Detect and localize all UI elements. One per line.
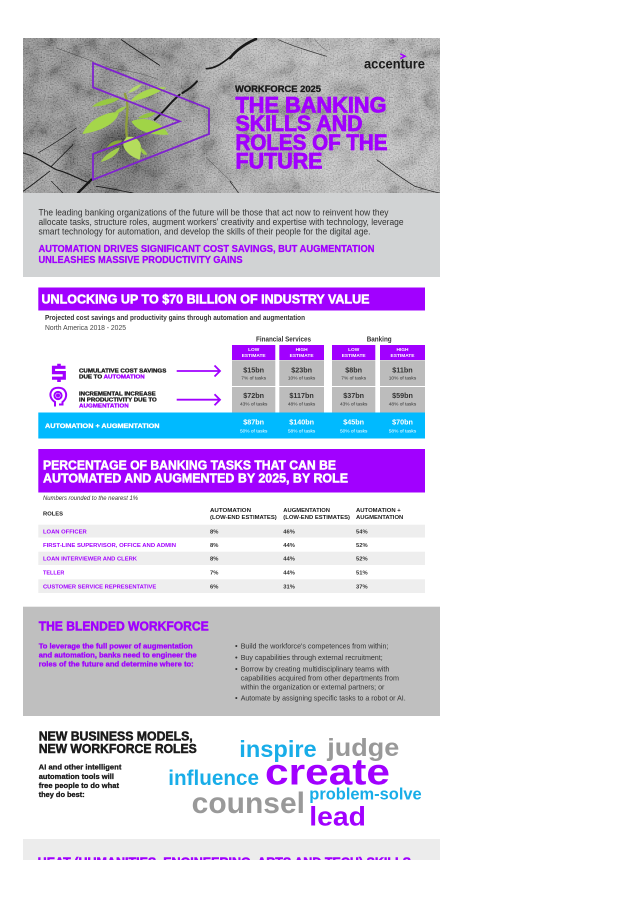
bullet list: Automate by assigning specific tasks to a robot or AI. bbox=[241, 693, 406, 702]
column headers: HIGH bbox=[296, 347, 308, 353]
intro headline: AUTOMATION DRIVES SIGNIFICANT COST SAVINGS, BUT AUGMENTATION bbox=[38, 244, 374, 255]
total band: automation + augmentation: $87bn bbox=[243, 417, 264, 426]
total band: automation + augmentation: $70bn bbox=[392, 417, 413, 426]
word cloud: judge bbox=[326, 734, 399, 762]
body text bbox=[39, 763, 122, 799]
row label: productivity: INCREMENTAL INCREASE bbox=[79, 391, 156, 397]
eyebrow: workforce 2025: WORKFORCE 2025 bbox=[235, 84, 322, 95]
section heading bar: UNLOCKING UP TO $70 BILLION OF INDUSTRY VALUE bbox=[42, 293, 370, 307]
table row stripes bbox=[38, 525, 425, 593]
row: teller bbox=[43, 570, 368, 576]
total band: automation + augmentation: 58% of tasks bbox=[288, 428, 316, 434]
section heading bar bbox=[38, 288, 425, 310]
row: loan officer bbox=[43, 529, 368, 535]
panel: introduction bbox=[23, 193, 440, 277]
table header: (LOW-END ESTIMATES) bbox=[283, 515, 350, 521]
word cloud: inspire bbox=[239, 736, 317, 762]
table row: cost savings values: $15bn bbox=[243, 366, 264, 375]
row label: cost savings bbox=[79, 368, 166, 381]
row: loan interviewer: 52% bbox=[356, 557, 368, 563]
chart subtitle: Projected cost savings and productivity gains through automation and augmentation bbox=[45, 313, 305, 322]
table row: cost savings values: 10% of tasks bbox=[288, 376, 316, 382]
panel: industry value bbox=[38, 288, 425, 438]
row: loan officer: LOAN OFFICER bbox=[43, 529, 88, 535]
table row: productivity values: 48% of tasks bbox=[389, 402, 417, 408]
row: first-line supervisor: 44% bbox=[283, 543, 295, 549]
intro headline bbox=[38, 244, 374, 266]
word cloud: problem-solve bbox=[309, 786, 422, 804]
row: teller: 51% bbox=[356, 570, 368, 576]
row: customer service: CUSTOMER SERVICE REPRESENTATIVE bbox=[43, 584, 156, 590]
table header: AUTOMATION + bbox=[356, 508, 401, 514]
intro paragraph: allocate tasks, structure roles, augment workers' creativity and expertise with technology, leverage bbox=[38, 217, 404, 227]
bullet list bbox=[235, 642, 406, 702]
bullet list: within the organization or external partners; or bbox=[240, 683, 385, 692]
row: customer service bbox=[43, 584, 368, 590]
row label: productivity: AUGMENTATION bbox=[79, 404, 129, 410]
column headers: ESTIMATE bbox=[242, 353, 266, 359]
table row: cost savings values: 7% of tasks bbox=[341, 376, 367, 382]
table row: productivity values: $37bn bbox=[343, 391, 364, 400]
word cloud: influence bbox=[168, 767, 259, 790]
panel: tasks by role bbox=[38, 449, 425, 593]
bullet list: capabilities acquired from other departments from bbox=[241, 673, 399, 682]
body text: they do best: bbox=[39, 790, 85, 799]
word cloud: counsel bbox=[192, 787, 305, 820]
green seedling bbox=[82, 84, 169, 162]
column headers: ESTIMATE bbox=[342, 353, 366, 359]
row: teller: 7% bbox=[210, 570, 218, 576]
table row: productivity values: $117bn bbox=[289, 391, 314, 400]
total band: automation + augmentation: $45bn bbox=[343, 417, 364, 426]
total band: automation + augmentation: AUTOMATION + AUGMENTATION bbox=[45, 423, 160, 430]
bullet list: • bbox=[235, 664, 238, 673]
accenture logo: accenture bbox=[364, 57, 425, 72]
body text: AI and other intelligent bbox=[39, 763, 122, 772]
row: teller: 44% bbox=[283, 570, 295, 576]
hero banner bbox=[23, 38, 440, 193]
panel: blended workforce bbox=[23, 607, 440, 716]
row: loan officer: 8% bbox=[210, 529, 218, 535]
row label: productivity: IN PRODUCTIVITY DUE TO bbox=[79, 397, 157, 403]
row: loan officer: 54% bbox=[356, 529, 368, 535]
word cloud: lead bbox=[309, 802, 366, 832]
body text: automation tools will bbox=[39, 772, 114, 781]
table header: AUGMENTATION bbox=[356, 515, 403, 521]
heading bbox=[39, 730, 197, 756]
bullet list: Buy capabilities through external recruitment; bbox=[241, 653, 383, 662]
total band: automation + augmentation bbox=[38, 412, 425, 438]
main title: ROLES OF THE bbox=[236, 130, 388, 155]
region and period: North America 2018 - 2025 bbox=[45, 323, 126, 332]
lead-in text bbox=[39, 642, 197, 669]
row: teller: TELLER bbox=[43, 570, 65, 576]
panel: new workforce roles bbox=[39, 730, 422, 832]
main title: FUTURE bbox=[236, 148, 322, 174]
group label: financial services: Financial Services bbox=[256, 336, 311, 344]
bullet list: Borrow by creating multidisciplinary teams with bbox=[241, 664, 389, 673]
total band: automation + augmentation: 50% of tasks bbox=[240, 428, 268, 434]
total band: automation + augmentation: 50% of tasks bbox=[340, 428, 368, 434]
row: loan interviewer: 8% bbox=[210, 557, 218, 563]
intro paragraph: The leading banking organizations of the future will be those that act now to reinvent how they bbox=[38, 208, 389, 218]
group label: banking: Banking bbox=[367, 336, 392, 344]
column headers: ESTIMATE bbox=[391, 353, 415, 359]
table header bbox=[43, 508, 403, 521]
rounding note: Numbers rounded to the nearest 1% bbox=[43, 496, 139, 502]
row: first-line supervisor: 8% bbox=[210, 543, 218, 549]
table header: (LOW-END ESTIMATES) bbox=[210, 515, 277, 521]
table column backgrounds bbox=[232, 345, 425, 413]
section heading bar bbox=[38, 449, 425, 492]
intro paragraph bbox=[38, 208, 404, 236]
row label: productivity bbox=[79, 391, 157, 410]
row: loan interviewer bbox=[43, 557, 368, 563]
row: loan officer: 46% bbox=[283, 529, 295, 535]
row: first-line supervisor: FIRST-LINE SUPERVISOR, OFFICE AND ADMIN bbox=[43, 543, 176, 549]
panel: clipped HEAT skills section bbox=[23, 839, 440, 860]
column headers: LOW bbox=[248, 347, 260, 353]
table row: productivity values: 43% of tasks bbox=[340, 402, 368, 408]
main title bbox=[235, 96, 388, 169]
row: first-line supervisor: 52% bbox=[356, 543, 368, 549]
row: loan interviewer: 44% bbox=[283, 557, 295, 563]
table row: cost savings values: 10% of tasks bbox=[389, 376, 417, 382]
table row: productivity values bbox=[240, 391, 417, 408]
table row: cost savings values: $8bn bbox=[345, 366, 362, 375]
bullet list: Build the workforce's competences from within; bbox=[241, 642, 388, 651]
row: loan interviewer: LOAN INTERVIEWER AND CLERK bbox=[43, 557, 138, 563]
table row: cost savings values: 7% of tasks bbox=[241, 376, 267, 382]
table header: AUGMENTATION bbox=[283, 508, 330, 514]
bullet list: • bbox=[235, 693, 238, 702]
main title: THE BANKING bbox=[236, 92, 386, 118]
table row: productivity values: 48% of tasks bbox=[288, 402, 316, 408]
lead-in text: and automation, banks need to engineer the bbox=[39, 650, 197, 660]
section heading bar: AUTOMATED AND AUGMENTED BY 2025, BY ROLE bbox=[43, 471, 348, 485]
heading: NEW BUSINESS MODELS, bbox=[39, 730, 193, 744]
column headers: ESTIMATE bbox=[290, 353, 314, 359]
intro headline: UNLEASHES MASSIVE PRODUCTIVITY GAINS bbox=[38, 255, 243, 266]
intro paragraph: smart technology for automation, and develop the skills of their people for the digital age. bbox=[38, 226, 370, 236]
word cloud bbox=[168, 734, 422, 832]
table header: ROLES bbox=[43, 512, 63, 518]
main title: SKILLS AND bbox=[236, 111, 362, 136]
table row: productivity values: $59bn bbox=[392, 391, 413, 400]
table row: productivity values: $72bn bbox=[243, 391, 264, 400]
arrow: productivity bbox=[177, 394, 220, 405]
row: customer service: 31% bbox=[283, 584, 295, 590]
column headers: HIGH bbox=[396, 347, 409, 353]
row label: cost savings: CUMULATIVE COST SAVINGS bbox=[79, 368, 166, 374]
table row: cost savings values: $11bn bbox=[392, 366, 413, 375]
column headers bbox=[242, 347, 415, 359]
bullet list: • bbox=[235, 642, 238, 651]
lead-in text: To leverage the full power of augmentation bbox=[39, 642, 193, 650]
total band: automation + augmentation: $140bn bbox=[289, 417, 314, 426]
body text: free people to do what bbox=[39, 781, 119, 790]
column headers: LOW bbox=[348, 347, 360, 353]
lead-in text: roles of the future and determine where to: bbox=[39, 660, 194, 669]
icon: dollar sign bbox=[52, 364, 66, 382]
total band: automation + augmentation: 58% of tasks bbox=[389, 428, 417, 434]
table row: cost savings values: $23bn bbox=[291, 366, 312, 375]
arrow: cost savings bbox=[177, 366, 220, 376]
clipped heading: HEAT (HUMANITIES, ENGINEERING, ARTS AND TECH) SKILLS bbox=[38, 856, 411, 870]
word cloud: create bbox=[265, 752, 390, 792]
icon: head with gear bbox=[50, 388, 66, 406]
heading: THE BLENDED WORKFORCE bbox=[39, 619, 209, 633]
table row: productivity values: 43% of tasks bbox=[240, 402, 268, 408]
bullet list: • bbox=[235, 653, 238, 662]
stone photo background bbox=[23, 38, 440, 193]
table row: cost savings values bbox=[241, 366, 417, 382]
accenture logo bbox=[364, 53, 424, 68]
row label: cost savings: DUE TO AUTOMATION bbox=[79, 375, 145, 381]
section heading bar: PERCENTAGE OF BANKING TASKS THAT CAN BE bbox=[43, 459, 336, 473]
purple chevron outline bbox=[93, 63, 209, 180]
row: first-line supervisor bbox=[43, 543, 368, 549]
row: customer service: 6% bbox=[210, 584, 218, 590]
table header: AUTOMATION bbox=[210, 508, 251, 514]
row: customer service: 37% bbox=[356, 584, 368, 590]
heading: NEW WORKFORCE ROLES bbox=[39, 742, 197, 756]
